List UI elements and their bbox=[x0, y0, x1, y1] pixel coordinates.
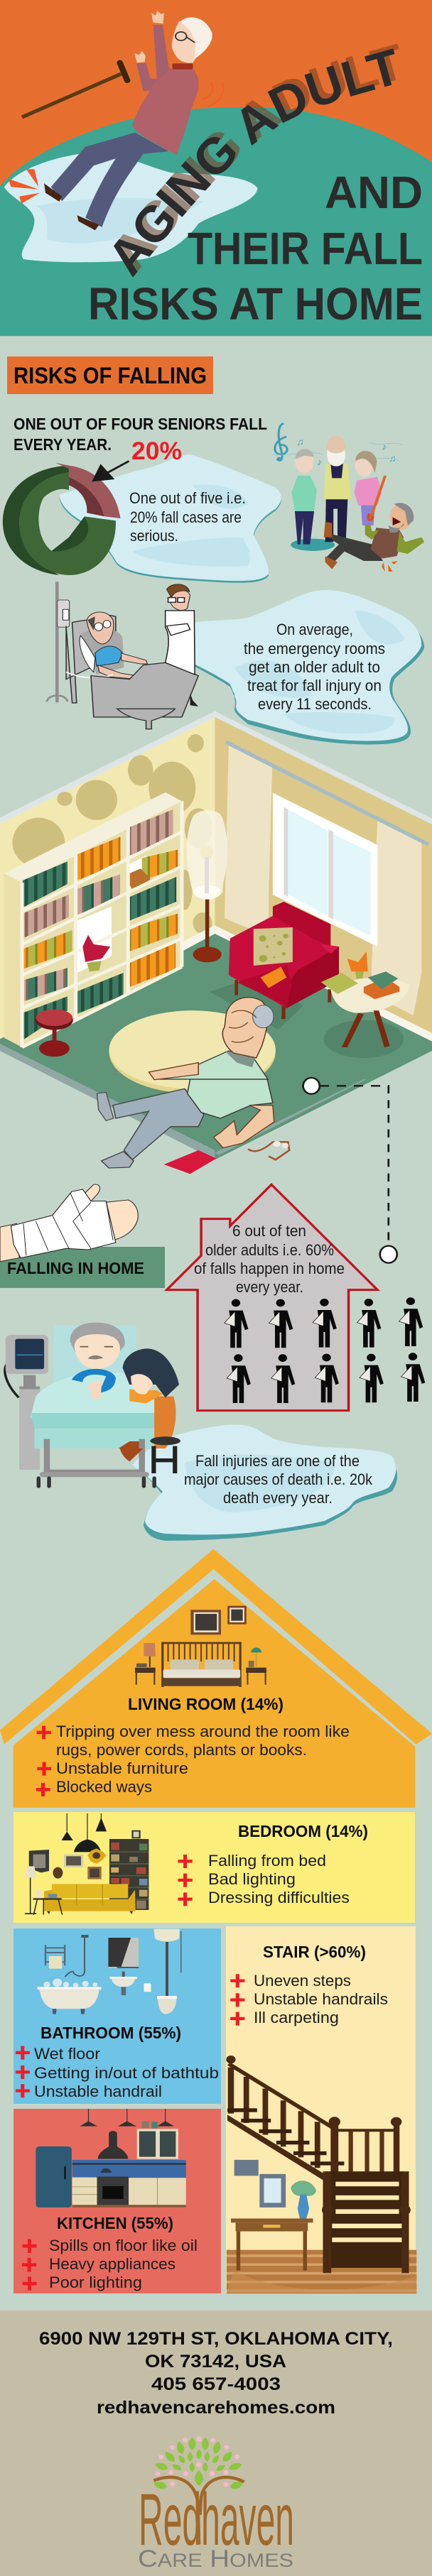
heading: stair: STAIR (>60%) bbox=[263, 1943, 366, 1961]
bookshelf bbox=[4, 792, 182, 1047]
callout puddle: emergency rooms: every 11 seconds. bbox=[258, 695, 372, 713]
list: living room risks: Unstable furniture bbox=[56, 1759, 188, 1777]
callout puddle: emergency rooms bbox=[193, 590, 424, 744]
illustration: isometric living room with fallen man bbox=[0, 711, 432, 1263]
list: bathroom risks: Unstable handrail bbox=[34, 2083, 162, 2100]
panel: stair bbox=[226, 1926, 416, 2293]
callout puddle: emergency rooms: get an older adult to bbox=[249, 658, 380, 676]
logo tree bbox=[152, 2436, 244, 2545]
house with statistic bbox=[167, 1184, 377, 1411]
icon: patient in hospital bed with doctor bbox=[47, 582, 198, 717]
icon: seniors singing and man falling: ♪ bbox=[317, 457, 322, 467]
window and curtains bbox=[225, 742, 428, 1015]
label: 20 percent: 20% bbox=[131, 437, 182, 465]
icon: bandaged arm bbox=[0, 1184, 138, 1262]
kitchen background bbox=[14, 2109, 221, 2293]
room walls and floor bbox=[0, 711, 432, 1159]
logo tagline: CARE HOMES bbox=[138, 2545, 293, 2572]
list: bathroom risks: Wet floor bbox=[34, 2045, 100, 2063]
contact details: 405 657-4003 bbox=[151, 2374, 281, 2394]
list: living room risks: Tripping over mess around the room like bbox=[56, 1723, 350, 1740]
panel: footer bbox=[0, 2310, 432, 2576]
logo: redhaven care homes bbox=[138, 2436, 294, 2572]
callout puddle: one out of five bbox=[59, 454, 281, 583]
icon: falling man on puddle bbox=[4, 11, 258, 262]
icon: bathtub, sink and toilet bbox=[37, 1929, 181, 2014]
heading: bedroom: BEDROOM (14%) bbox=[238, 1822, 368, 1840]
icon: bed with nightstands and frames bbox=[135, 1606, 266, 1687]
header orange background bbox=[0, 0, 432, 336]
list: living room risks bbox=[36, 1723, 350, 1796]
armchair bbox=[210, 902, 339, 1030]
pictogram: ten people with slings bbox=[225, 1297, 425, 1403]
fallen elderly man bbox=[97, 998, 289, 1174]
shelf boards bbox=[22, 801, 182, 1047]
callout puddle: emergency rooms: treat for fall injury on bbox=[247, 677, 382, 694]
heading: one out of four seniors fall: ONE OUT OF FOUR SENIORS FALL bbox=[14, 415, 267, 433]
list: bedroom risks: Falling from bed bbox=[208, 1852, 326, 1870]
title: and their fall risks at home bbox=[88, 167, 423, 329]
panel: kitchen bbox=[14, 2109, 221, 2293]
icon: wooden staircase bbox=[226, 2056, 411, 2273]
heading tag: risks of falling: RISKS OF FALLING bbox=[14, 363, 207, 388]
icon: seniors singing and man falling bbox=[273, 424, 424, 572]
heading tag: risks of falling bbox=[7, 356, 213, 394]
heading: kitchen: KITCHEN (55%) bbox=[57, 2214, 173, 2232]
panel: falling in home bbox=[0, 1184, 425, 1541]
title: and their fall risks at home: AND bbox=[325, 167, 423, 218]
chart: 3d donut 20 percent bbox=[3, 463, 120, 575]
icon: floor, wall decor and console bbox=[227, 2160, 416, 2293]
list: living room risks: Blocked ways bbox=[56, 1778, 152, 1796]
list: living room risks: rugs, power cords, plants or books. bbox=[56, 1741, 307, 1759]
list: kitchen risks: Heavy appliances bbox=[49, 2255, 176, 2273]
icon: seniors singing and man falling: ♫ bbox=[296, 437, 304, 447]
heading band: falling in home bbox=[0, 1247, 165, 1288]
book rows bbox=[23, 809, 178, 1040]
heading: bathroom: BATHROOM (55%) bbox=[40, 2024, 181, 2042]
callout puddle: emergency rooms: the emergency rooms bbox=[244, 640, 385, 657]
contact details: 6900 NW 129TH ST, OKLAHOMA CITY, bbox=[39, 2329, 393, 2349]
heading: living room: LIVING ROOM (14%) bbox=[128, 1695, 284, 1713]
callout puddle: fall injuries: major causes of death i.e. 20k bbox=[184, 1470, 373, 1488]
list: kitchen risks: Poor lighting bbox=[49, 2274, 142, 2291]
house with statistic: 6 out of ten bbox=[232, 1222, 306, 1240]
callout puddle: one out of five: serious. bbox=[130, 527, 178, 545]
stair background bbox=[226, 1926, 416, 2293]
header teal hill bbox=[0, 107, 432, 336]
stool bbox=[36, 1010, 73, 1057]
callout puddle: emergency rooms: On average, bbox=[276, 621, 353, 638]
house with statistic: every year. bbox=[236, 1278, 303, 1296]
heading: one out of four seniors fall: EVERY YEAR. bbox=[14, 435, 112, 454]
panel: bathroom bbox=[14, 1928, 221, 2104]
bedroom background bbox=[14, 1812, 415, 1923]
house with statistic: of falls happen in home bbox=[194, 1260, 345, 1277]
list: bedroom risks: Bad lighting bbox=[208, 1870, 296, 1888]
contact details: redhavencarehomes.com bbox=[97, 2398, 335, 2418]
icon: sofa, shelves and lamps bbox=[25, 1813, 148, 1915]
connector dashed line bbox=[303, 1078, 397, 1263]
heading: one out of four seniors fall bbox=[14, 415, 267, 454]
list: bedroom risks bbox=[178, 1852, 350, 1906]
panel: risks of falling bbox=[3, 356, 424, 583]
footer background bbox=[0, 2310, 432, 2576]
house with statistic: older adults i.e. 60% bbox=[205, 1241, 334, 1259]
title: aging adult: AGING ADULT bbox=[114, 48, 395, 278]
icon: seniors singing and man falling: ♫ bbox=[389, 454, 396, 464]
arrow to donut bbox=[92, 461, 129, 481]
list: stair risks: Ill carpeting bbox=[254, 2009, 339, 2026]
heading band: falling in home: FALLING IN HOME bbox=[7, 1259, 144, 1277]
list: bathroom risks bbox=[16, 2045, 219, 2100]
callout puddle: fall injuries: Fall injuries are one of the bbox=[195, 1452, 360, 1470]
roof and house shape bbox=[0, 1549, 432, 1808]
icon: kitchen appliances bbox=[36, 2109, 186, 2207]
callout puddle: one out of five: One out of five i.e. bbox=[129, 489, 246, 507]
list: kitchen risks: Spills on floor like oil bbox=[49, 2237, 198, 2254]
title: aging adult: AGING ADULT bbox=[119, 44, 399, 273]
panel: bedroom bbox=[14, 1812, 415, 1923]
list: stair risks bbox=[230, 1972, 388, 2026]
list: bedroom risks: Dressing difficulties bbox=[208, 1889, 350, 1906]
bed leg bbox=[117, 709, 175, 729]
list: stair risks: Uneven steps bbox=[254, 1972, 351, 1990]
contact details bbox=[39, 2329, 393, 2418]
floor lamp bbox=[187, 810, 227, 962]
floor bottom edge bbox=[66, 1074, 432, 1155]
icon: patient in bed with caring daughter bbox=[5, 1323, 180, 1486]
contact details: OK 73142, USA bbox=[145, 2352, 286, 2372]
side table with books bbox=[321, 951, 409, 1058]
list: kitchen risks bbox=[22, 2237, 198, 2291]
header panel bbox=[0, 0, 432, 337]
callout puddle: fall injuries bbox=[132, 1425, 397, 1541]
icon: seniors singing and man falling: ♪ bbox=[382, 442, 387, 452]
panel: living room house bbox=[0, 1549, 432, 1808]
callout puddle: one out of five: 20% fall cases are bbox=[130, 508, 242, 526]
bathroom background bbox=[14, 1928, 221, 2104]
list: stair risks: Unstable handrails bbox=[254, 1990, 388, 2008]
round rug bbox=[109, 1010, 276, 1093]
callout puddle: fall injuries: death every year. bbox=[223, 1489, 333, 1507]
list: bathroom risks: Getting in/out of bathtub bbox=[34, 2064, 219, 2082]
